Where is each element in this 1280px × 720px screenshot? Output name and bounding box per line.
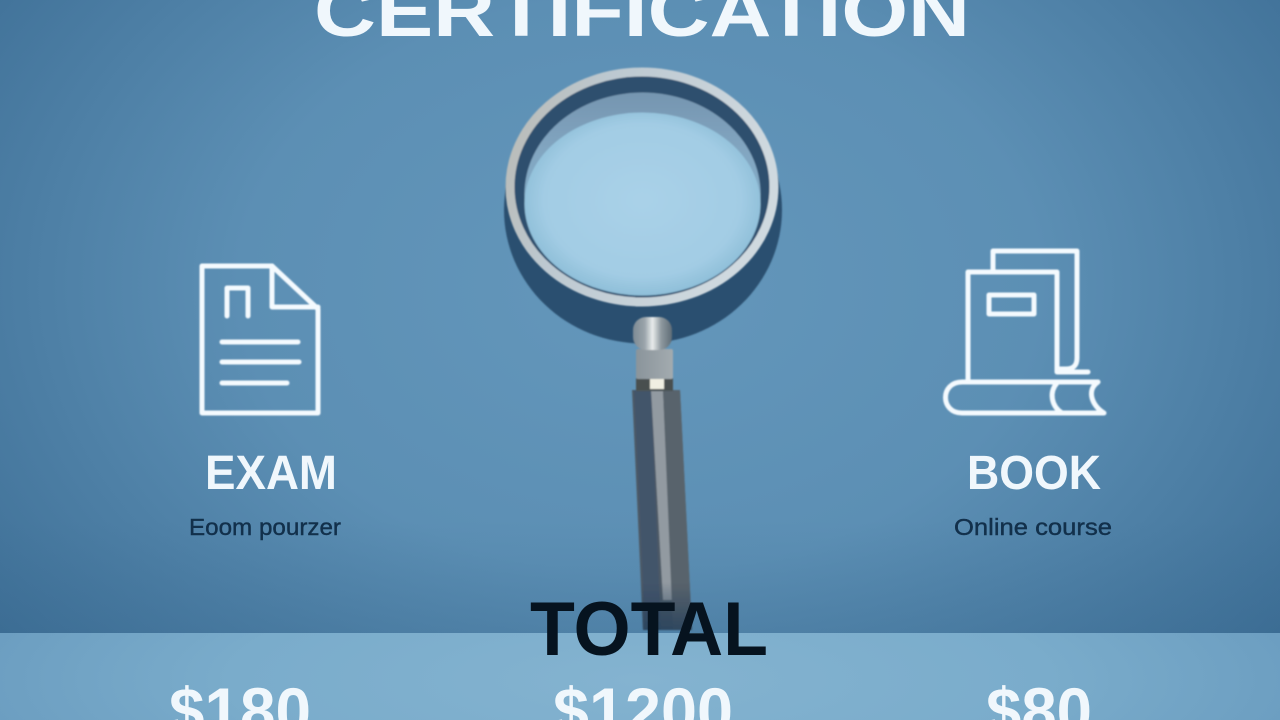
- floor band: [0, 633, 1280, 720]
- caption: book: Online course: [954, 514, 1112, 540]
- label: exam: EXAM: [205, 447, 337, 500]
- total heading: TOTAL: [530, 587, 768, 672]
- handle: [632, 390, 692, 630]
- icon: book: [946, 251, 1104, 413]
- caption: exam: Eoom pourzer: [189, 514, 341, 540]
- icon: magnifying glass: [504, 72, 782, 630]
- lens shadow: [504, 76, 782, 344]
- metal ring and lens: [510, 72, 774, 302]
- metal collar: [633, 317, 673, 391]
- label: book: BOOK: [967, 447, 1101, 500]
- icon: exam document: [202, 266, 318, 413]
